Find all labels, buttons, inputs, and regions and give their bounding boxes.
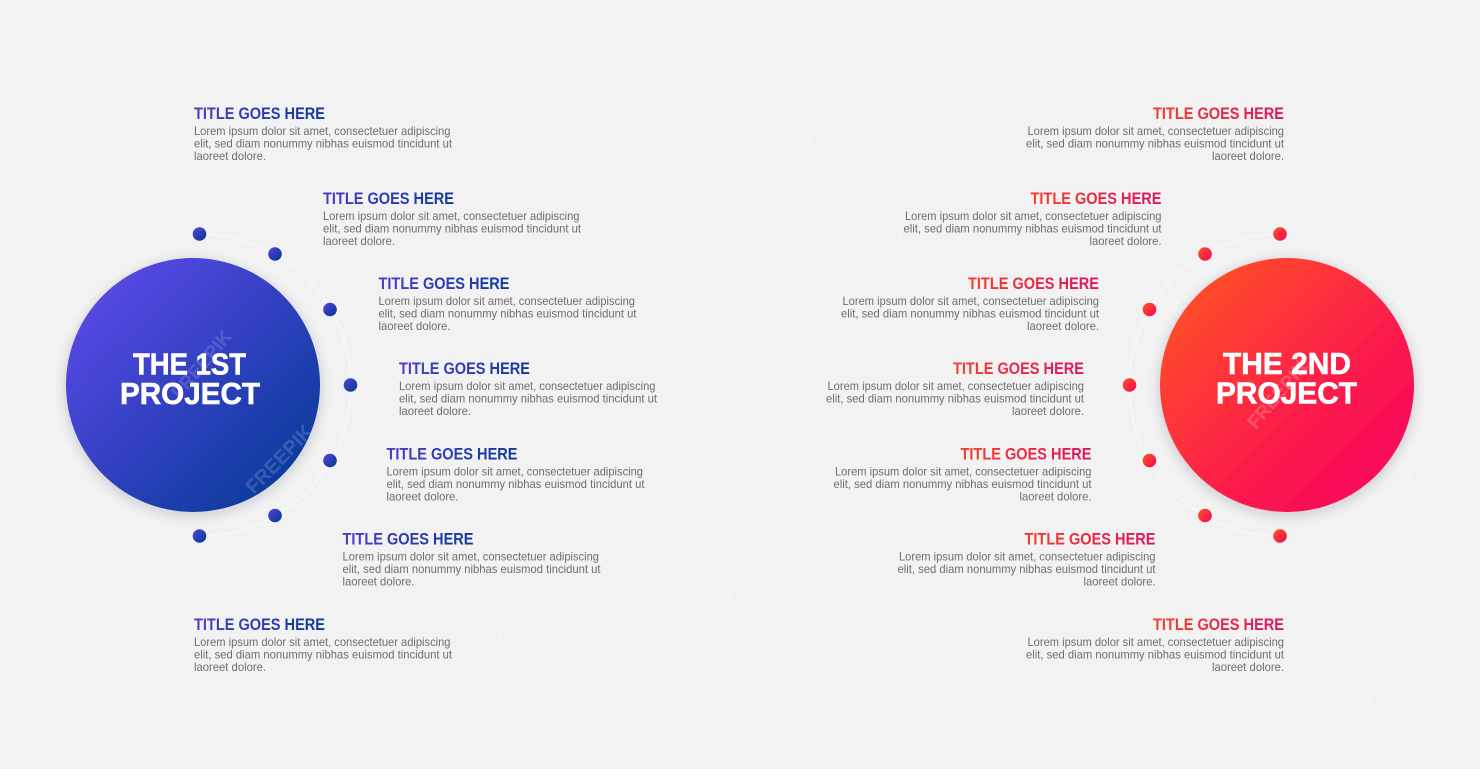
panel: second project circle: FREEPIK	[1160, 251, 1229, 328]
watermark pattern: FREEPIK	[963, 95, 1050, 178]
text block: left item 3: Lorem ipsum dolor sit amet, consectetuer adipiscing	[378, 295, 635, 308]
text block: right item 7	[1026, 616, 1285, 674]
text block: left item 3: TITLE GOES HERE	[378, 275, 510, 293]
text block: left item 1	[194, 105, 453, 163]
text block: left item 2: laoreet dolore.	[323, 235, 395, 248]
text block: left item 5: laoreet dolore.	[386, 490, 458, 504]
heading: the 2nd project: THE 2ND	[1223, 346, 1351, 381]
watermark pattern: FREEPIK	[563, 490, 650, 573]
text block: left item 1: TITLE GOES HERE	[194, 105, 325, 123]
watermark pattern: FREEPIK	[698, 360, 785, 443]
text block: left item 5: elit, sed diam nonummy nibhas euismod tincidunt ut	[386, 478, 645, 491]
heading: the 1st project: PROJECT	[120, 376, 260, 411]
text block: right item 6: TITLE GOES HERE	[1024, 530, 1156, 548]
watermark pattern: FREEPIK	[523, 150, 610, 233]
text block: left item 7: laoreet dolore.	[194, 661, 266, 674]
panel: second project circle: FREEPIK	[1244, 356, 1313, 433]
timeline dots: project 1	[193, 227, 357, 543]
text block: right item 2: laoreet dolore.	[1090, 235, 1162, 248]
text block: left item 7: Lorem ipsum dolor sit amet, consectetuer adipiscing	[194, 636, 450, 649]
watermark pattern: FREEPIK	[923, 320, 1010, 403]
text block: right item 2: elit, sed diam nonummy nibhas euismod tincidunt ut	[904, 222, 1162, 236]
text block: left item 4	[399, 360, 658, 418]
text block: right item 3: laoreet dolore.	[1027, 320, 1099, 333]
text block: right item 7: TITLE GOES HERE	[1153, 616, 1284, 634]
text block: left item 5	[386, 446, 645, 504]
text block: right item 5	[834, 446, 1092, 504]
text block: left item 7: TITLE GOES HERE	[194, 616, 325, 634]
panel: first project circle	[66, 258, 320, 512]
text block: right item 1: laoreet dolore.	[1212, 150, 1284, 163]
text block: left item 2	[323, 190, 582, 248]
text block: right item 1: TITLE GOES HERE	[1153, 105, 1284, 123]
text block: right item 5: laoreet dolore.	[1020, 490, 1092, 504]
text block: left item 1: laoreet dolore.	[194, 150, 266, 163]
text block: left item 7	[194, 616, 453, 674]
text block: right item 1: Lorem ipsum dolor sit amet, consectetuer adipiscing	[1028, 125, 1284, 138]
watermark pattern: FREEPIK	[413, 70, 500, 153]
text block: left item 4: TITLE GOES HERE	[399, 360, 530, 378]
arc connector: project 1	[200, 234, 351, 536]
text block: right item 7: Lorem ipsum dolor sit amet, consectetuer adipiscing	[1028, 636, 1284, 649]
watermark pattern: FREEPIK	[98, 0, 185, 83]
text block: left item 5: Lorem ipsum dolor sit amet, consectetuer adipiscing	[386, 466, 643, 478]
panel: first project circle: FREEPIK	[242, 420, 318, 498]
text block: right item 4: elit, sed diam nonummy nibhas euismod tincidunt ut	[826, 392, 1085, 406]
watermark pattern: FREEPIK	[18, 480, 105, 563]
watermark pattern: FREEPIK	[1378, 240, 1465, 323]
watermark pattern: FREEPIK	[883, 545, 970, 628]
watermark pattern: FREEPIK	[1283, 150, 1370, 233]
text block: left item 3: elit, sed diam nonummy nibhas euismod tincidunt ut	[378, 308, 637, 320]
text block: left item 2: TITLE GOES HERE	[323, 190, 454, 208]
heading: the 2nd project: PROJECT	[1216, 376, 1357, 410]
watermark pattern: FREEPIK	[788, 455, 875, 538]
watermark pattern: FREEPIK	[658, 585, 745, 668]
text block: right item 5: Lorem ipsum dolor sit amet, consectetuer adipiscing	[835, 466, 1092, 478]
text block: right item 6: elit, sed diam nonummy nibhas euismod tincidunt ut	[898, 563, 1156, 576]
text block: right item 4: Lorem ipsum dolor sit amet, consectetuer adipiscing	[828, 380, 1084, 393]
heading: the 1st project	[120, 346, 260, 411]
watermark pattern: FREEPIK	[113, 575, 200, 658]
timeline dots: project 2	[1123, 227, 1287, 543]
text block: right item 6: laoreet dolore.	[1084, 576, 1156, 588]
text block: left item 2: Lorem ipsum dolor sit amet, consectetuer adipiscing	[323, 210, 580, 223]
watermark pattern: FREEPIK	[203, 670, 290, 753]
text block: right item 4	[826, 360, 1085, 418]
panel: second project circle	[1160, 251, 1414, 512]
text block: right item 6	[898, 530, 1156, 588]
text block: right item 5: elit, sed diam nonummy nibhas euismod tincidunt ut	[834, 478, 1092, 491]
text block: right item 3: elit, sed diam nonummy nibhas euismod tincidunt ut	[841, 308, 1100, 320]
text block: right item 6: Lorem ipsum dolor sit amet, consectetuer adipiscing	[899, 550, 1156, 564]
text block: left item 2: elit, sed diam nonummy nibhas euismod tincidunt ut	[323, 222, 582, 236]
watermark pattern: FREEPIK	[738, 130, 825, 213]
text block: left item 6	[342, 530, 601, 588]
watermark pattern: FREEPIK	[643, 40, 730, 123]
watermark pattern: FREEPIK	[428, 625, 515, 708]
text block: right item 7: laoreet dolore.	[1212, 661, 1284, 674]
text block: left item 4: laoreet dolore.	[399, 405, 471, 418]
text block: left item 1: elit, sed diam nonummy nibhas euismod tincidunt ut	[194, 138, 453, 150]
watermark pattern: FREEPIK	[613, 255, 700, 338]
text block: right item 4: laoreet dolore.	[1012, 405, 1084, 418]
watermark pattern: FREEPIK	[1198, 600, 1285, 683]
watermark pattern: FREEPIK	[828, 225, 915, 308]
arc connector: project 2	[1129, 234, 1280, 536]
text block: left item 3	[378, 275, 637, 333]
watermark pattern: FREEPIK	[748, 680, 835, 763]
text block: right item 1: elit, sed diam nonummy nibhas euismod tincidunt ut	[1026, 138, 1285, 150]
text block: right item 3: Lorem ipsum dolor sit amet, consectetuer adipiscing	[842, 295, 1099, 308]
watermark pattern: FREEPIK	[1338, 465, 1425, 548]
text block: left item 3: laoreet dolore.	[378, 320, 450, 333]
text block: left item 6: TITLE GOES HERE	[342, 530, 474, 548]
watermark pattern: FREEPIK	[58, 255, 145, 338]
watermark pattern: FREEPIK	[978, 640, 1065, 723]
text block: right item 4: TITLE GOES HERE	[953, 360, 1084, 378]
panel: first project circle: FREEPIK	[168, 326, 237, 403]
text block: right item 3: TITLE GOES HERE	[968, 275, 1099, 293]
text block: left item 4: Lorem ipsum dolor sit amet, consectetuer adipiscing	[399, 380, 656, 393]
text block: left item 6: Lorem ipsum dolor sit amet, consectetuer adipiscing	[342, 550, 599, 564]
watermark pattern: FREEPIK	[1193, 40, 1280, 123]
text block: left item 6: laoreet dolore.	[342, 576, 414, 588]
text block: right item 7: elit, sed diam nonummy nibhas euismod tincidunt ut	[1026, 648, 1285, 662]
text block: right item 5: TITLE GOES HERE	[960, 446, 1092, 464]
text block: left item 4: elit, sed diam nonummy nibhas euismod tincidunt ut	[399, 392, 658, 406]
heading: the 1st project: THE 1ST	[133, 346, 246, 382]
text block: left item 6: elit, sed diam nonummy nibhas euismod tincidunt ut	[342, 563, 601, 576]
text block: left item 5: TITLE GOES HERE	[386, 446, 518, 464]
text block: right item 2: Lorem ipsum dolor sit amet, consectetuer adipiscing	[905, 210, 1162, 223]
text block: right item 1	[1026, 105, 1285, 163]
text block: left item 7: elit, sed diam nonummy nibhas euismod tincidunt ut	[194, 648, 453, 662]
text block: right item 2	[904, 190, 1162, 248]
text block: left item 1: Lorem ipsum dolor sit amet, consectetuer adipiscing	[194, 125, 450, 138]
text block: right item 2: TITLE GOES HERE	[1030, 190, 1162, 208]
heading: the 2nd project	[1216, 346, 1357, 410]
text block: right item 3	[841, 275, 1100, 333]
